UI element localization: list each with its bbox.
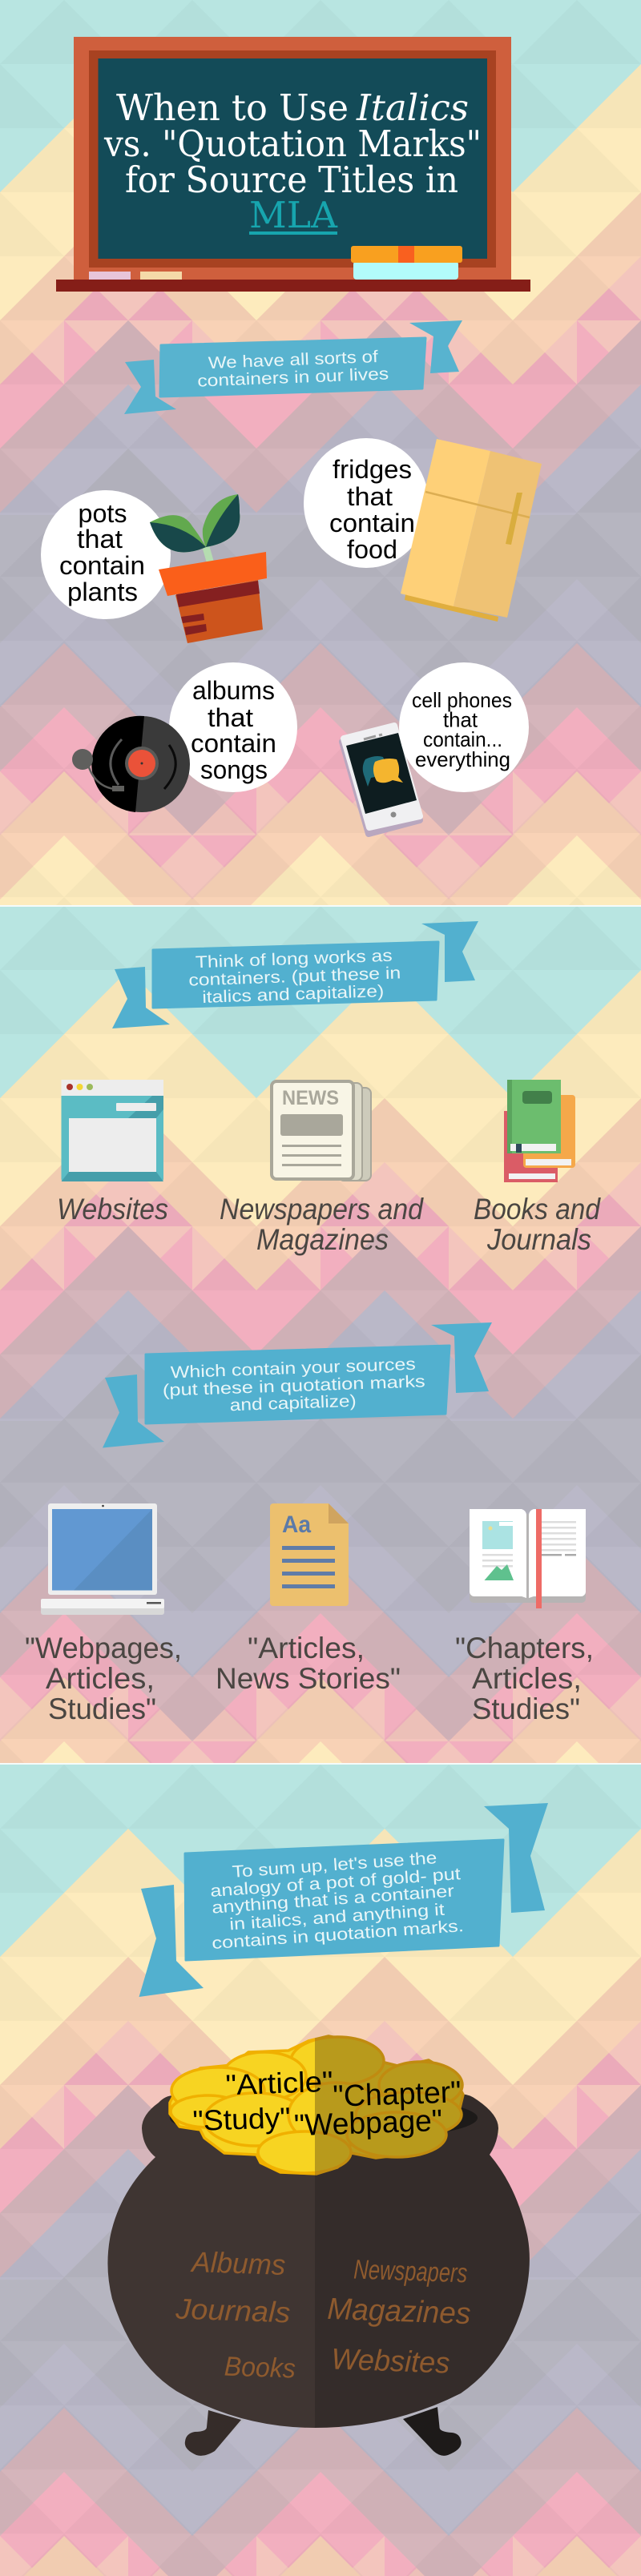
icon: open book — [470, 1509, 586, 1608]
title: Italics — [356, 87, 469, 129]
labels on the coins: "Study" — [192, 2101, 291, 2137]
pot feet — [185, 2407, 462, 2456]
banner: think of long works as containers: containers. (put these in — [188, 964, 401, 990]
labels on the pot: Websites — [331, 2342, 450, 2380]
bubble: pots that contain plants: plants — [67, 578, 138, 606]
caption: long works: Magazines — [256, 1223, 389, 1256]
bubble: pots that contain plants: pots — [79, 499, 127, 528]
divider line between section two and three — [0, 1763, 641, 1765]
title: for Source Titles in — [125, 159, 458, 201]
icon: potted plant — [150, 494, 267, 643]
icon: laptop — [41, 1503, 164, 1615]
caption: long works — [57, 1193, 601, 1256]
banner: to sum up: analogy of a pot of gold- put — [210, 1865, 462, 1901]
bubble: cell phones that contain everything: cell phones — [412, 688, 512, 712]
bubble: albums that contain songs: albums — [192, 676, 275, 705]
labels on the pot: Books — [224, 2351, 296, 2385]
icon: stacked books — [504, 1080, 575, 1182]
labels on the pot — [175, 2245, 471, 2385]
caption: sources: News Stories" — [216, 1662, 401, 1695]
banner: to sum up: To sum up, let's use the — [232, 1849, 437, 1882]
banner: to sum up: anything that is a container — [212, 1882, 454, 1918]
background: section two — [0, 907, 641, 1763]
banner: to sum up: contains in quotation marks. — [212, 1917, 464, 1953]
bubble: cell phones that contain everything — [399, 662, 529, 792]
banner: to sum up — [139, 1803, 548, 1997]
labels on the pot: Albums — [190, 2245, 286, 2281]
icon: newspaper: NEWS — [282, 1087, 339, 1109]
icon: vinyl record — [72, 716, 190, 812]
bubble: fridges that contain food: contain — [329, 509, 415, 537]
bubble: cell phones that contain everything: everything — [415, 747, 510, 771]
banner: which contain your sources — [103, 1322, 492, 1448]
caption: long works: Websites — [57, 1193, 168, 1226]
banner: to sum up: in italics, and anything it — [229, 1901, 445, 1934]
bubble: albums that contain songs — [169, 662, 297, 792]
bubble: cell phones that contain everything: that — [443, 708, 478, 732]
title: When to Use — [116, 87, 349, 129]
labels on the coins — [192, 2065, 462, 2143]
banner: think of long works as containers: italics and capitalize) — [202, 982, 385, 1007]
labels on the coins: "Chapter" — [333, 2075, 462, 2114]
title: MLA — [249, 194, 337, 236]
caption: sources: Studies" — [48, 1693, 156, 1725]
banner: we have all sorts of containers: containers in our lives — [197, 364, 389, 391]
caption: sources: "Articles, — [248, 1632, 365, 1664]
banner: which contain your sources: and capitalize) — [229, 1392, 357, 1415]
caption: sources: Articles, — [46, 1662, 155, 1695]
bubble: albums that contain songs: contain — [191, 729, 276, 758]
gold coins — [170, 2036, 463, 2174]
chalkboard title panel — [56, 37, 530, 292]
pot body — [107, 2094, 530, 2428]
labels on the coins: "Webpage" — [293, 2104, 443, 2143]
icon: newspaper — [272, 1081, 371, 1181]
caption: long works: Newspapers and — [220, 1193, 424, 1226]
caption: sources: Articles, — [472, 1662, 582, 1695]
bubble: pots that contain plants: contain — [59, 551, 145, 580]
banner: think of long works as containers: Think of long works as — [195, 947, 393, 972]
bubble: fridges that contain food: that — [347, 482, 393, 511]
caption: sources: "Chapters, — [455, 1632, 594, 1664]
banner: which contain your sources: Which contain your sources — [170, 1355, 416, 1382]
caption: long works: Books and — [474, 1193, 601, 1226]
labels on the coins: "Article" — [225, 2065, 333, 2101]
bubble: fridges that contain food — [304, 438, 429, 568]
background: section three — [0, 1765, 641, 2576]
bubble: pots that contain plants — [41, 490, 171, 619]
caption: sources: Studies" — [472, 1693, 580, 1725]
bubble: pots that contain plants: that — [77, 525, 123, 553]
icon: website browser — [61, 1080, 163, 1181]
banner: think of long works as containers — [112, 921, 478, 1028]
bubble: cell phones that contain everything: contain... — [423, 727, 502, 751]
icon: fridge — [401, 439, 542, 622]
banner: we have all sorts of containers — [124, 320, 462, 414]
bubble: albums that contain songs: songs — [200, 755, 268, 784]
labels on the pot: Journals — [175, 2292, 291, 2328]
caption: sources: "Webpages, — [25, 1632, 182, 1664]
title: vs. "Quotation Marks" — [103, 123, 482, 165]
banner: which contain your sources: (put these in quotation marks — [162, 1372, 425, 1400]
caption: sources — [25, 1632, 594, 1725]
divider line between section one and two — [0, 905, 641, 907]
background: section one — [0, 0, 641, 905]
icon: smartphone — [342, 726, 420, 834]
title — [103, 87, 482, 236]
bubble: fridges that contain food: food — [347, 535, 397, 564]
chalk pieces — [89, 272, 182, 280]
pot of gold — [107, 2036, 530, 2456]
bubble: fridges that contain food: fridges — [333, 455, 412, 484]
icon: article document: Aa — [282, 1511, 311, 1538]
chalkboard shelf — [56, 280, 530, 292]
labels on the pot: Newspapers — [353, 2255, 468, 2288]
banner: we have all sorts of containers: We have all sorts of — [208, 348, 378, 372]
eraser — [351, 246, 462, 280]
caption: long works: Journals — [486, 1223, 591, 1256]
bubble: albums that contain songs: that — [208, 703, 253, 732]
icon: article document — [270, 1503, 349, 1606]
labels on the pot: Magazines — [327, 2292, 471, 2331]
